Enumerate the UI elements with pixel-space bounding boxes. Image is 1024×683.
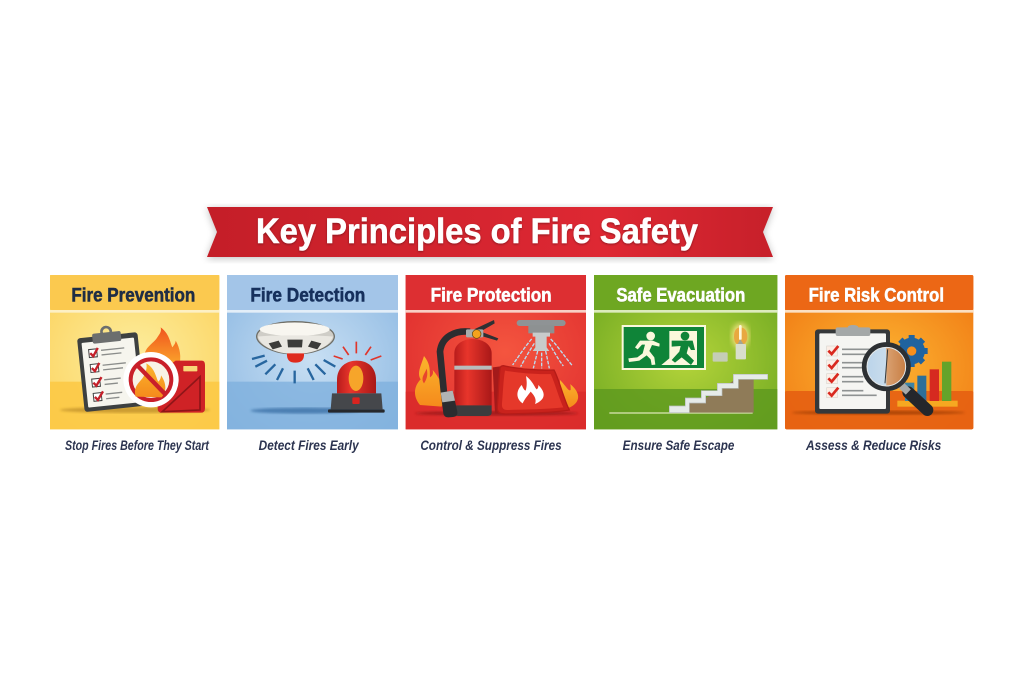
icon: clipboard checklist: [815, 325, 890, 414]
caption: Control & Suppress Fires: [420, 438, 562, 453]
icon: flame behind: [145, 327, 180, 367]
heading: fire detection: Fire Detection: [250, 285, 365, 306]
heading: safe evacuation: Safe Evacuation: [616, 285, 745, 306]
panel: safe evacuation: [594, 275, 777, 453]
icon: wall light: [732, 323, 749, 359]
caption: Detect Fires Early: [259, 438, 360, 453]
icon: switch plate: [713, 352, 728, 362]
icon: flames: [415, 356, 578, 407]
icon: prohibition sign: [123, 352, 179, 407]
icon: exit sign: [622, 325, 706, 370]
caption: Stop Fires Before They Start: [65, 438, 210, 453]
icon: fuel can: [158, 361, 205, 413]
panel: fire risk control: [785, 275, 973, 453]
panel: fire detection: [227, 275, 398, 453]
icon: gear: [896, 335, 928, 367]
icon: red beacon: [328, 342, 385, 413]
panel: fire prevention: [50, 275, 219, 453]
icon: sprinkler: [513, 320, 573, 368]
heading: fire prevention: Fire Prevention: [71, 285, 195, 306]
title: Key Principles of Fire Safety: [256, 212, 698, 251]
icon: fire blanket: [493, 366, 569, 414]
icon: clipboard checklist: [76, 324, 145, 412]
panel: fire protection: [406, 275, 586, 453]
heading: fire protection: Fire Protection: [431, 285, 552, 306]
icon: fire extinguisher: [440, 320, 498, 417]
icon: smoke detector: [257, 322, 334, 363]
title banner: [207, 207, 773, 258]
icon: staircase: [669, 374, 768, 413]
icon: bar chart: [897, 362, 958, 407]
heading: fire risk control: Fire Risk Control: [809, 285, 944, 306]
caption: Assess & Reduce Risks: [805, 438, 942, 453]
icon: magnifying glass: [864, 345, 927, 410]
floor line: [609, 412, 753, 414]
icon: signal lines: [252, 356, 335, 383]
caption: Ensure Safe Escape: [623, 438, 735, 453]
